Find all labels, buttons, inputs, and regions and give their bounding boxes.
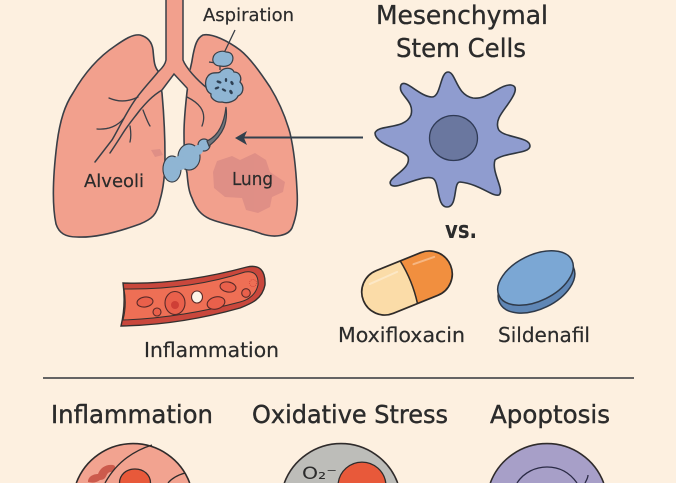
alveolar cluster (206, 68, 243, 103)
icon: oxidative stress cell (284, 444, 398, 483)
label: Aspiration: Aspiration (203, 5, 294, 26)
label: Lung: Lung (232, 169, 273, 190)
label: Inflammation under vessel: Inflammation (144, 338, 279, 362)
heading: Mesenchymal Stem Cells: Mesenchymal (376, 1, 548, 31)
divider (43, 377, 634, 379)
icon: inflamed blood vessel (121, 266, 265, 326)
aspiration pointer and small blue sac (209, 30, 235, 70)
icon: moxifloxacin capsule (355, 244, 459, 322)
arrow: stem cells to lung (235, 131, 363, 145)
cell nucleus (430, 116, 478, 160)
label: vs.: vs. (445, 216, 477, 244)
bronchial branches (97, 97, 204, 142)
icon: apoptosis cell (490, 444, 604, 483)
heading: Inflammation: Inflammation (51, 400, 213, 429)
icon: sildenafil tablet (489, 240, 584, 325)
heading: Oxidative Stress: Oxidative Stress (252, 400, 448, 429)
airway: trachea and bronchi (95, 0, 207, 162)
heading: Apoptosis: Apoptosis (490, 400, 610, 429)
label: Sildenafil: Sildenafil (498, 323, 590, 347)
lower blue mass in bronchus (163, 139, 210, 182)
label: Moxifloxacin: Moxifloxacin (338, 323, 465, 347)
label: Alveoli: Alveoli (84, 171, 144, 192)
left lung (53, 35, 165, 237)
icon: mesenchymal stem cell (375, 72, 530, 207)
icon: inflammation cell (76, 444, 190, 483)
right lung (184, 35, 297, 236)
illustration: lungs (53, 0, 297, 237)
heading: Mesenchymal Stem Cells (376, 1, 548, 64)
lung damage patches (151, 149, 285, 213)
heading: Mesenchymal Stem Cells: Stem Cells (396, 34, 526, 64)
dark airway plug (207, 107, 226, 146)
